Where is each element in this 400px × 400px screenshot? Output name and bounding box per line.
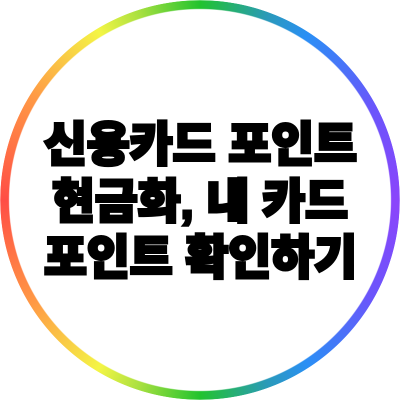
title line 1: 신용카드 포인트 bbox=[44, 118, 357, 171]
title line 2: 현금화, 내 카드 bbox=[52, 175, 348, 228]
title line 3: 포인트 확인하기 bbox=[44, 231, 357, 284]
